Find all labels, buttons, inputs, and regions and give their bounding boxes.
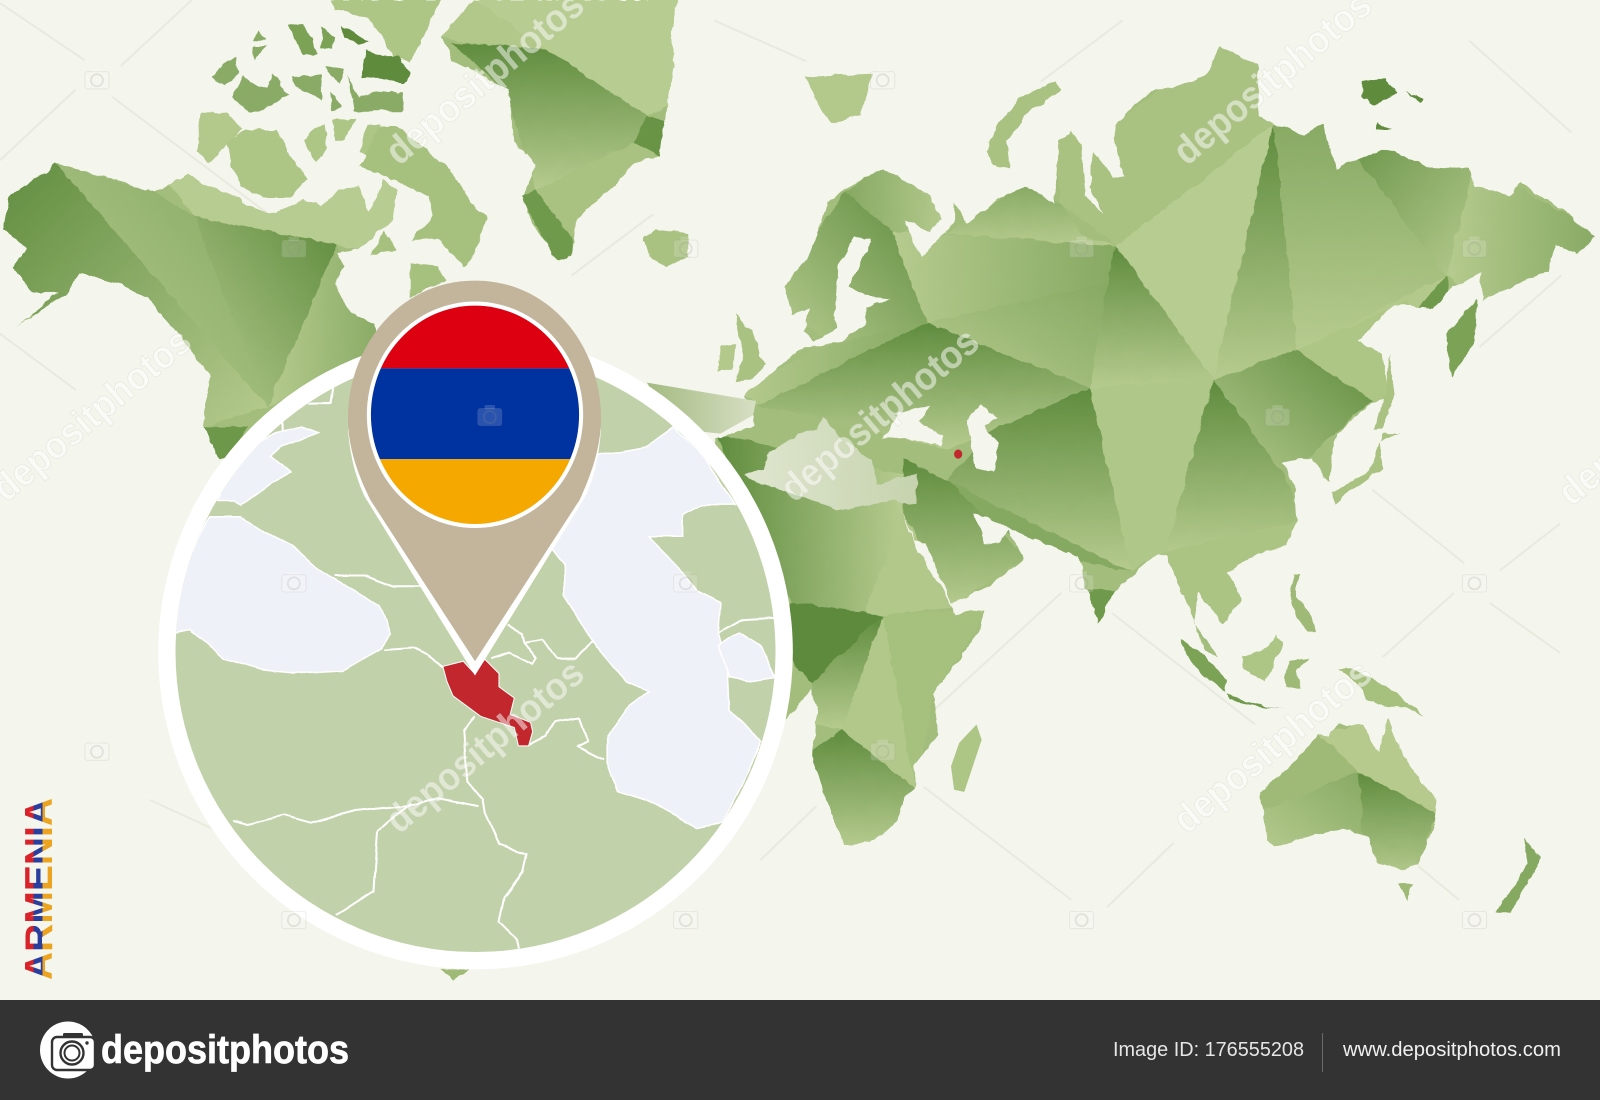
- depositphotos watermarks: depositphotos: [1165, 651, 1380, 842]
- regional land: [176, 352, 776, 952]
- polygon-faceted continents: [3, 0, 1595, 870]
- image id: Image ID: 176555208: [1113, 1039, 1304, 1061]
- Madagascar: [951, 724, 982, 792]
- magnifier lens: [153, 335, 793, 969]
- national borders: [234, 388, 773, 949]
- regional seas: [153, 427, 776, 828]
- logo wordmark: depositphotos: [101, 1028, 349, 1072]
- depositphotos watermarks: depositphotos: [377, 651, 592, 842]
- watermark camera icons: [85, 68, 1487, 929]
- depositphotos watermarks: depositphotos: [772, 320, 987, 510]
- Eurasia facets: [735, 41, 1600, 638]
- lens ring: [158, 335, 793, 969]
- Europe and Asia islands: [717, 73, 1478, 504]
- website url: www.depositphotos.com: [1342, 1039, 1561, 1061]
- Armenia country shape: [443, 659, 533, 746]
- inland seas on world map: [884, 405, 998, 614]
- depositphotos watermarks: [0, 0, 1600, 842]
- footer bar: [0, 1000, 1600, 1100]
- location pin: [348, 281, 601, 676]
- North America facets: [0, 153, 408, 469]
- Mediterranean highlight: [743, 417, 918, 510]
- icon: camera logo: [40, 1022, 96, 1078]
- beam reflection strip near the lens: [647, 383, 756, 434]
- flag of Armenia: [362, 301, 587, 531]
- Southeast Asia and Oceania islands: [439, 574, 1541, 980]
- Armenia location dot: [954, 449, 962, 459]
- Greenland facets: [442, 0, 684, 261]
- Iceland: [643, 230, 688, 266]
- Australia facets: [1260, 714, 1439, 878]
- Canadian arctic islands: [196, 0, 487, 297]
- vertical country title: ARMENIA: [18, 798, 61, 980]
- Africa facets: [714, 434, 990, 847]
